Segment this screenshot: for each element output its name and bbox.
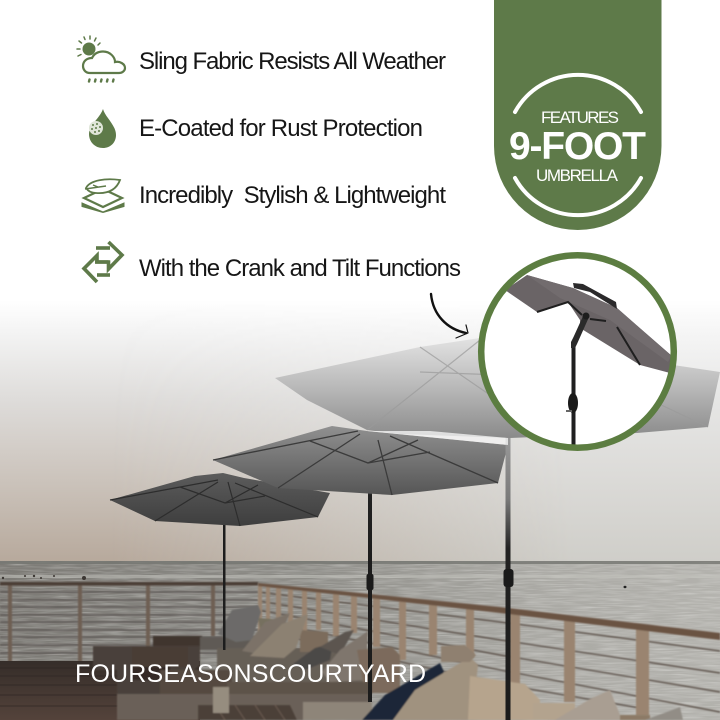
badge: features 9-foot umbrella [494,0,662,230]
inset: close-up of tilt mechanism [481,255,674,449]
umbrella pole: small umbrella [223,505,226,650]
icon: sun, cloud and rain [77,36,125,82]
brand name: FOURSEASONSCOURTYARD [75,660,426,688]
background photo: deck and sea [0,320,720,720]
sky gradient [0,300,720,562]
feature text: crank and tilt: With the Crank and Tilt Functions [139,255,461,282]
feature text: weather: Sling Fabric Resists All Weather [139,48,446,75]
badge text: 9-foot: 9-FOOT [509,125,646,168]
badge text: umbrella: UMBRELLA [536,166,619,185]
umbrella: large faded [275,338,720,445]
feature text: stylish and lightweight: Incredibly Stylish & Lightweight [139,182,446,209]
sea [0,561,720,720]
green ring [481,255,674,448]
badge bottom arc [515,178,641,215]
right railing [258,583,720,716]
curved arrow pointing at close-up [431,294,468,338]
outdoor furniture [93,605,683,720]
deck floor [0,661,200,720]
umbrella: medium [213,426,508,495]
badge top arc [515,75,641,112]
icon: water drop with coating [89,109,116,148]
umbrella pole: medium umbrella [366,432,374,702]
close-up umbrella [505,275,672,449]
icon: leaf on fabric layers [82,179,124,212]
icon: swap arrows [84,242,122,282]
umbrella: small [110,473,330,526]
feature text: rust protection: E-Coated for Rust Protection [139,115,423,142]
badge text: features: FEATURES [541,108,619,127]
umbrella pole: large umbrella [504,425,514,720]
left railing [0,582,258,662]
